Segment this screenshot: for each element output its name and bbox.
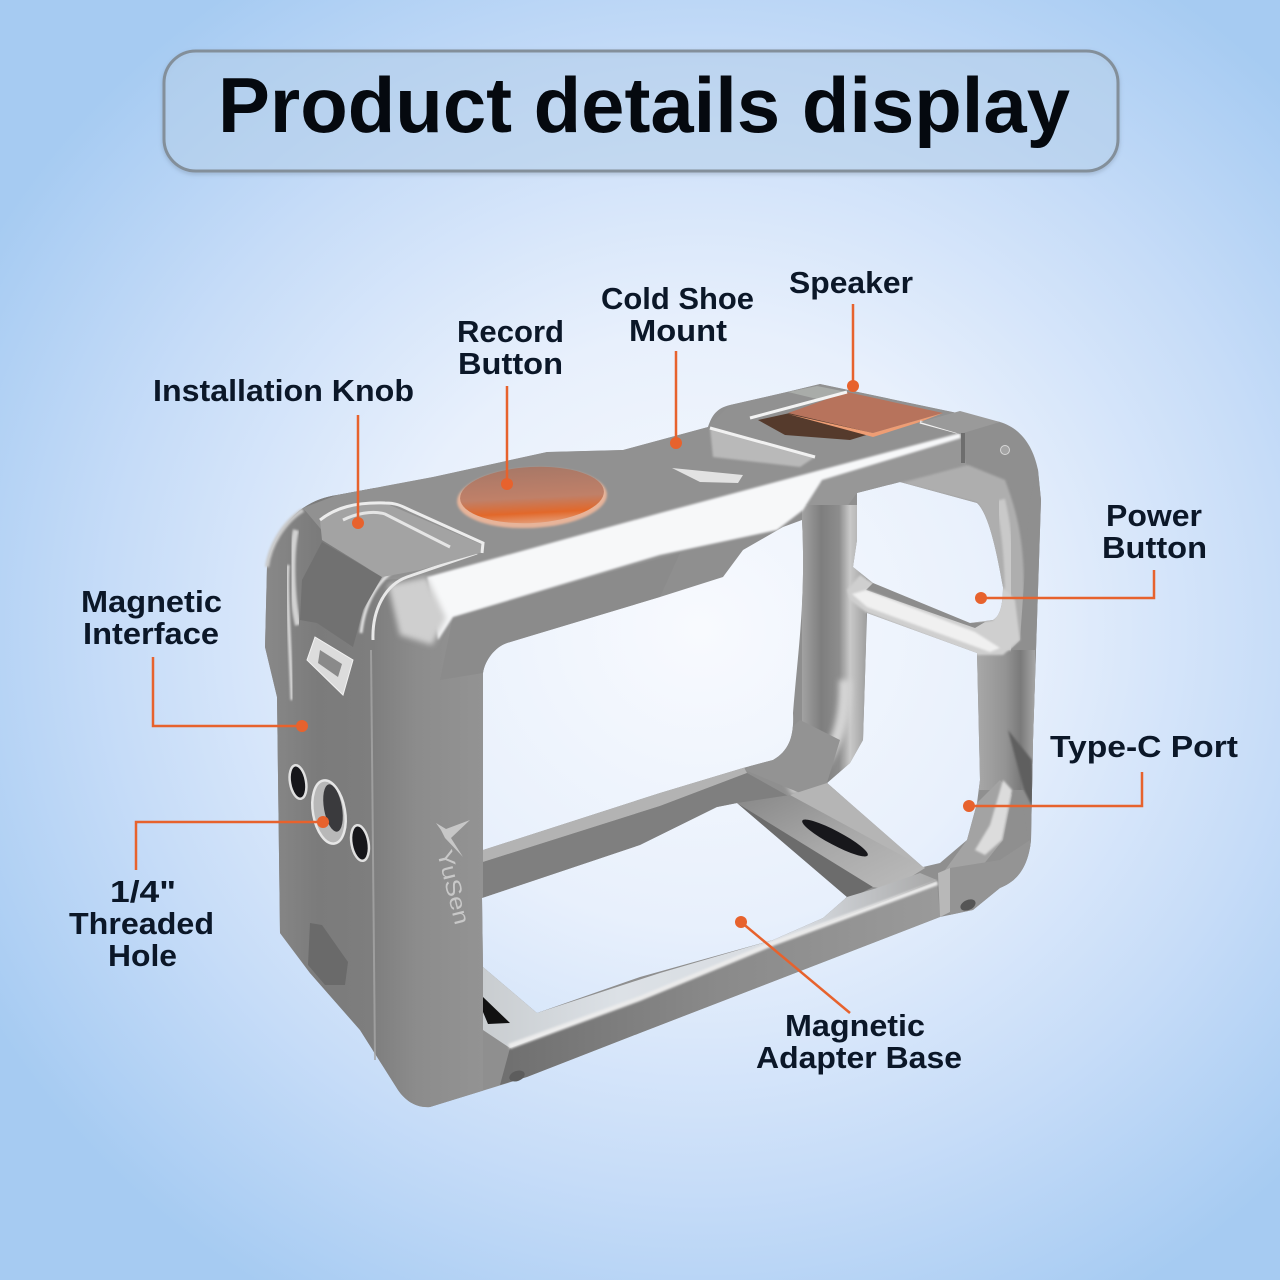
label: 1/4" Threaded Hole: 1/4" bbox=[110, 874, 176, 909]
logo: YuSen: YuSen bbox=[432, 847, 475, 927]
label: Installation Knob bbox=[153, 373, 414, 529]
label: Magnetic Interface: Interface bbox=[83, 616, 219, 651]
label: Magnetic Adapter Base: Adapter Base bbox=[756, 1040, 962, 1075]
label: Magnetic Interface: Magnetic bbox=[81, 584, 222, 619]
label: Record Button bbox=[457, 314, 564, 490]
label: Type-C Port: Type-C Port bbox=[1050, 729, 1238, 764]
recess clip bbox=[307, 637, 353, 695]
label: Power Button: Button bbox=[1102, 530, 1207, 565]
label: 1/4" Threaded Hole: Hole bbox=[108, 938, 177, 973]
label: Magnetic Adapter Base: Magnetic bbox=[785, 1008, 925, 1043]
label: Cold Shoe Mount: Mount bbox=[629, 313, 727, 348]
product: camera cage bbox=[250, 370, 1050, 1120]
label: Cold Shoe Mount bbox=[601, 281, 754, 449]
label: Magnetic Interface bbox=[81, 584, 308, 732]
side panel highlights bbox=[267, 510, 477, 1060]
label: 1/4" Threaded Hole bbox=[69, 816, 329, 973]
label: Speaker: Speaker bbox=[789, 265, 913, 300]
label: Magnetic Adapter Base bbox=[735, 916, 962, 1075]
latch notch bbox=[308, 923, 348, 985]
label: Speaker bbox=[789, 265, 913, 392]
label: Record Button: Button bbox=[458, 346, 563, 381]
label: Record Button: Record bbox=[457, 314, 564, 349]
speaker bbox=[750, 386, 1010, 463]
label: Cold Shoe Mount: Cold Shoe bbox=[601, 281, 754, 316]
label: 1/4" Threaded Hole: Threaded bbox=[69, 906, 214, 941]
magnetic interface recess bbox=[300, 542, 382, 647]
label: Type-C Port bbox=[963, 729, 1238, 812]
label: Installation Knob: Installation Knob bbox=[153, 373, 414, 408]
label: Power Button bbox=[975, 498, 1207, 604]
title banner: Product details display bbox=[218, 61, 1070, 149]
mounting holes bbox=[287, 764, 371, 862]
title banner bbox=[164, 51, 1118, 171]
lower-right detail: screw and slot bbox=[508, 814, 977, 1083]
record button bbox=[456, 463, 608, 532]
logo: YuSen bbox=[432, 820, 475, 927]
label: Power Button: Power bbox=[1106, 498, 1202, 533]
installation knob bbox=[320, 503, 483, 577]
cold shoe mount bbox=[672, 428, 815, 483]
